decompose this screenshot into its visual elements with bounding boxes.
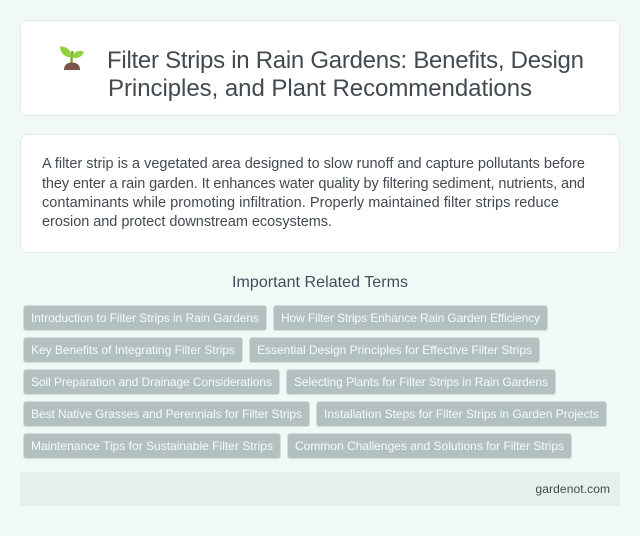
heading: related terms: Important Related Terms <box>232 274 408 291</box>
chip: efficiency: How Filter Strips Enhance Rain Garden Efficiency <box>281 311 540 325</box>
chip: soil preparation <box>24 370 280 394</box>
chip: challenges <box>288 434 572 458</box>
chip: introduction <box>24 306 266 330</box>
text block: definition: contaminants while promoting infiltration. Properly maintained filter strips reduce <box>42 195 559 211</box>
chip: installation: Installation Steps for Filter Strips in Garden Projects <box>324 407 599 421</box>
chip: challenges: Common Challenges and Solutions for Filter Strips <box>295 439 564 453</box>
chip: benefits <box>24 338 242 362</box>
title: Principles, and Plant Recommendations <box>108 75 532 102</box>
panel: definition text <box>20 134 620 252</box>
chip: maintenance <box>24 434 280 458</box>
text block: definition <box>42 156 585 230</box>
chip: selecting plants: Selecting Plants for Filter Strips in Rain Gardens <box>294 375 548 389</box>
text block: definition: they enter a rain garden. It enhances water quality by filtering sediment, nutrients, and <box>42 176 585 192</box>
title <box>107 47 584 102</box>
chip: soil preparation: Soil Preparation and Drainage Considerations <box>31 375 272 389</box>
footer: gardenot.com <box>536 482 610 496</box>
chip: introduction: Introduction to Filter Strips in Rain Gardens <box>31 311 259 325</box>
text block: definition: erosion and protect downstream ecosystems. <box>42 214 332 230</box>
footer <box>20 472 620 506</box>
panel: title card <box>20 20 620 116</box>
chip: native grasses: Best Native Grasses and Perennials for Filter Strips <box>31 407 302 421</box>
chip: selecting plants <box>286 370 556 394</box>
chip: maintenance: Maintenance Tips for Sustainable Filter Strips <box>31 439 273 453</box>
text block: definition: A filter strip is a vegetated area designed to slow runoff and capture pollutants before <box>42 156 585 172</box>
icon: sprout <box>60 46 84 70</box>
chip: native grasses <box>24 402 310 426</box>
chip: benefits: Key Benefits of Integrating Filter Strips <box>31 343 235 357</box>
chip: design principles: Essential Design Principles for Effective Filter Strips <box>257 343 532 357</box>
chip: efficiency <box>274 306 548 330</box>
title: Filter Strips in Rain Gardens: Benefits, Design <box>107 47 584 74</box>
chip: design principles <box>250 338 540 362</box>
chip: installation <box>316 402 606 426</box>
